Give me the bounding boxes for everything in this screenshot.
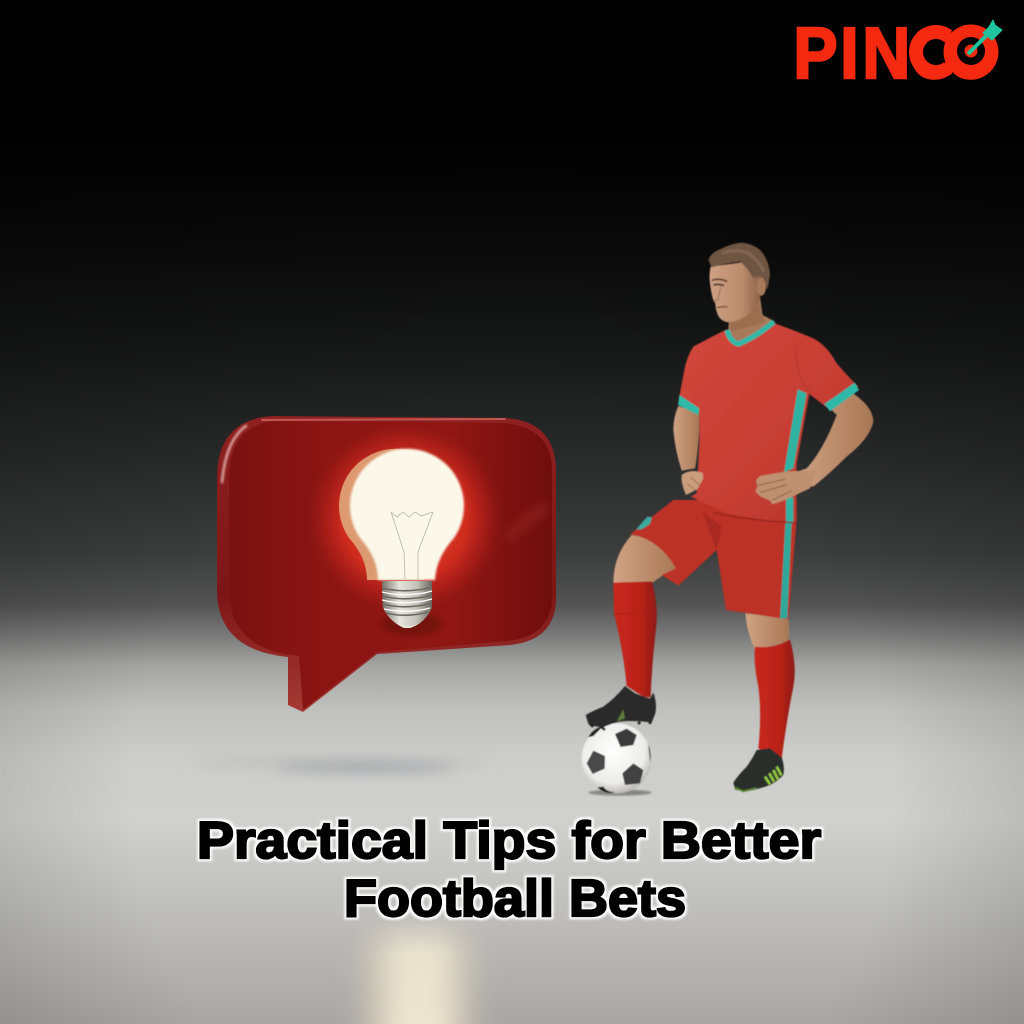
bulb base shadow <box>382 613 442 635</box>
left cuff <box>678 395 699 415</box>
jersey hem line <box>713 513 797 523</box>
bubble 3D side <box>217 416 556 712</box>
title: Football Bets <box>344 870 686 928</box>
shorts crest <box>636 517 652 529</box>
football player <box>582 243 873 796</box>
right arm <box>793 392 873 487</box>
bulb screw base <box>382 581 432 628</box>
title <box>197 812 821 928</box>
neck shade <box>730 300 765 332</box>
bubble highlights <box>222 419 548 542</box>
left arm <box>673 406 699 471</box>
player head <box>708 243 770 332</box>
raised boot <box>586 686 656 730</box>
hair <box>708 243 770 290</box>
ear <box>757 278 766 296</box>
logo: PINCO <box>793 12 1002 94</box>
raised thigh and knee <box>613 535 678 583</box>
raised leg sock <box>613 581 657 697</box>
logo arrow fletching <box>983 20 1002 40</box>
standing knee <box>745 613 789 650</box>
player hands and jersey hem <box>682 470 817 523</box>
ball shadow <box>588 790 652 796</box>
neck <box>728 297 775 345</box>
bulb glow <box>305 418 505 618</box>
bulb glass <box>350 449 464 580</box>
bulb filament <box>391 512 433 579</box>
logo C ring <box>916 32 948 72</box>
collar <box>727 322 774 344</box>
sock fold <box>614 611 657 614</box>
mouth <box>717 305 727 309</box>
title: Practical Tips for Better <box>197 812 821 870</box>
eye <box>713 284 724 286</box>
face <box>709 262 765 322</box>
right cuff <box>824 383 859 411</box>
logo wordmark: PINCO <box>793 12 997 94</box>
hair highlight <box>722 251 764 272</box>
standing leg sock <box>755 639 795 758</box>
shorts <box>630 500 797 619</box>
right hand <box>755 470 817 504</box>
standing boot <box>733 748 784 792</box>
player upper body <box>673 297 873 523</box>
logo target O <box>944 24 998 80</box>
shorts shading <box>702 510 722 550</box>
floor light streak <box>362 915 474 1024</box>
speech bubble with light bulb <box>217 416 556 712</box>
bubble front face <box>229 421 552 710</box>
jersey body <box>679 323 858 523</box>
logo C counter <box>923 39 949 65</box>
floor shadow of speech bubble <box>190 754 490 774</box>
nose shade <box>713 287 721 301</box>
brow <box>712 279 727 282</box>
jersey side stripe <box>784 389 807 523</box>
shorts side stripe <box>780 500 793 618</box>
left hand <box>682 471 703 495</box>
football <box>582 723 652 793</box>
bulb recess edge <box>339 449 453 580</box>
player lower body <box>582 500 797 796</box>
sleeve seam <box>796 345 810 393</box>
logo arrow <box>968 36 986 54</box>
